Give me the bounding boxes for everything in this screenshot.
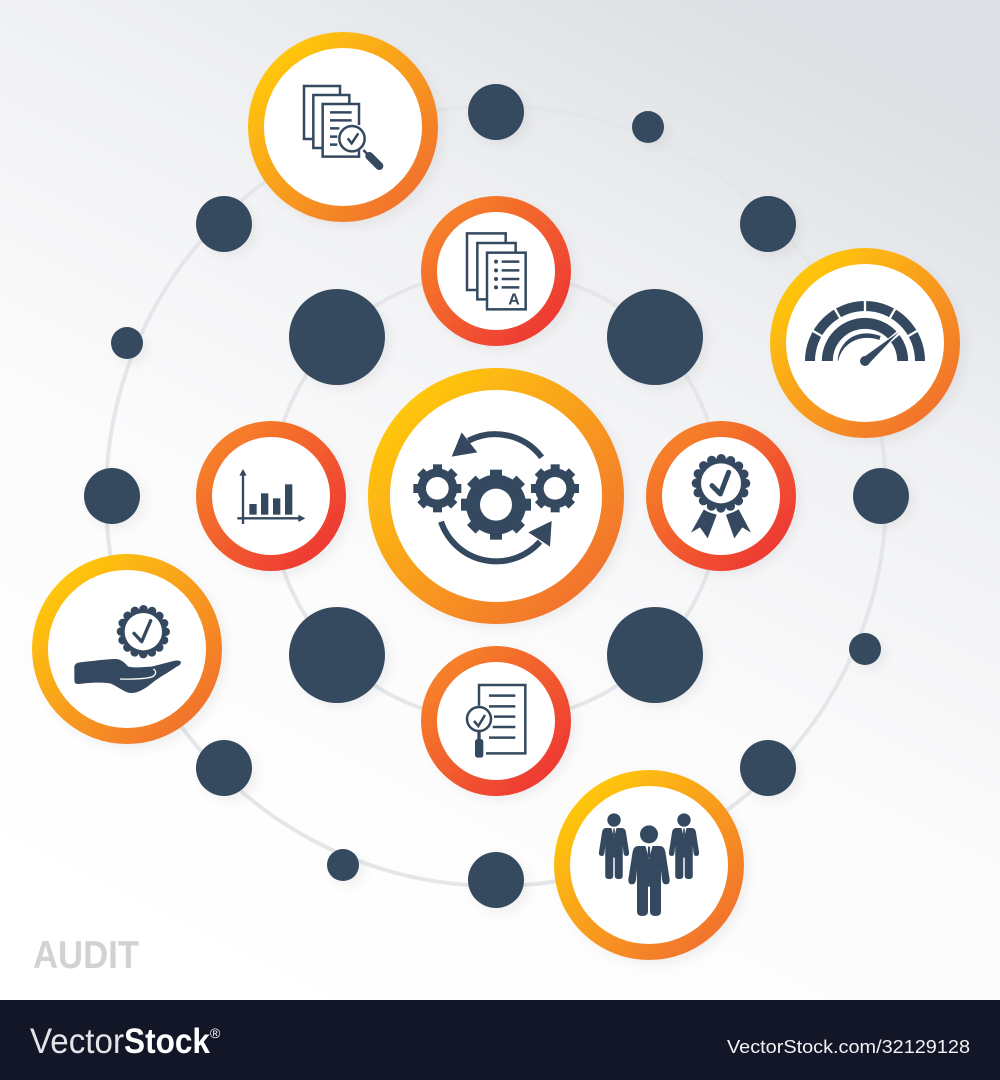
inner circle: certified ribbon: [654, 429, 788, 563]
footer logo: [30, 1022, 221, 1061]
inner circle: checklist documents: [429, 204, 563, 338]
icon: gauge: [810, 300, 920, 366]
outer circle: team: [562, 778, 736, 952]
inner circle: bar chart: [204, 429, 338, 563]
icon: bar chart: [237, 469, 305, 524]
inner circle: document inspection: [429, 654, 563, 788]
outer circle: speedometer: [778, 256, 952, 430]
icon: three business people: [599, 813, 699, 916]
connector rings: [106, 106, 886, 886]
icon: graded documents: A: [508, 291, 520, 308]
footer logo: Vector: [30, 1022, 124, 1061]
icon: documents with magnifier: [304, 86, 379, 166]
footer bar: [0, 1000, 1000, 1080]
navy dots: [84, 84, 909, 908]
outer circle: quality in hand: [40, 562, 214, 736]
person: left: [599, 813, 629, 879]
footer id: VectorStock.com/32129128: [727, 1036, 970, 1057]
title: AUDIT: [33, 934, 139, 977]
outer circle: document review: [256, 40, 430, 214]
icon: gears with cycle arrows: [413, 432, 579, 561]
person: centre: [628, 825, 670, 916]
icon: document with magnifier: [467, 685, 525, 758]
icon: hand holding badge: [74, 609, 181, 693]
icon: rosette with check: [690, 452, 752, 538]
footer logo: Stock: [124, 1022, 210, 1061]
person: right: [669, 813, 699, 879]
central circle: process gears: [379, 379, 613, 613]
footer logo: ®: [210, 1025, 221, 1041]
